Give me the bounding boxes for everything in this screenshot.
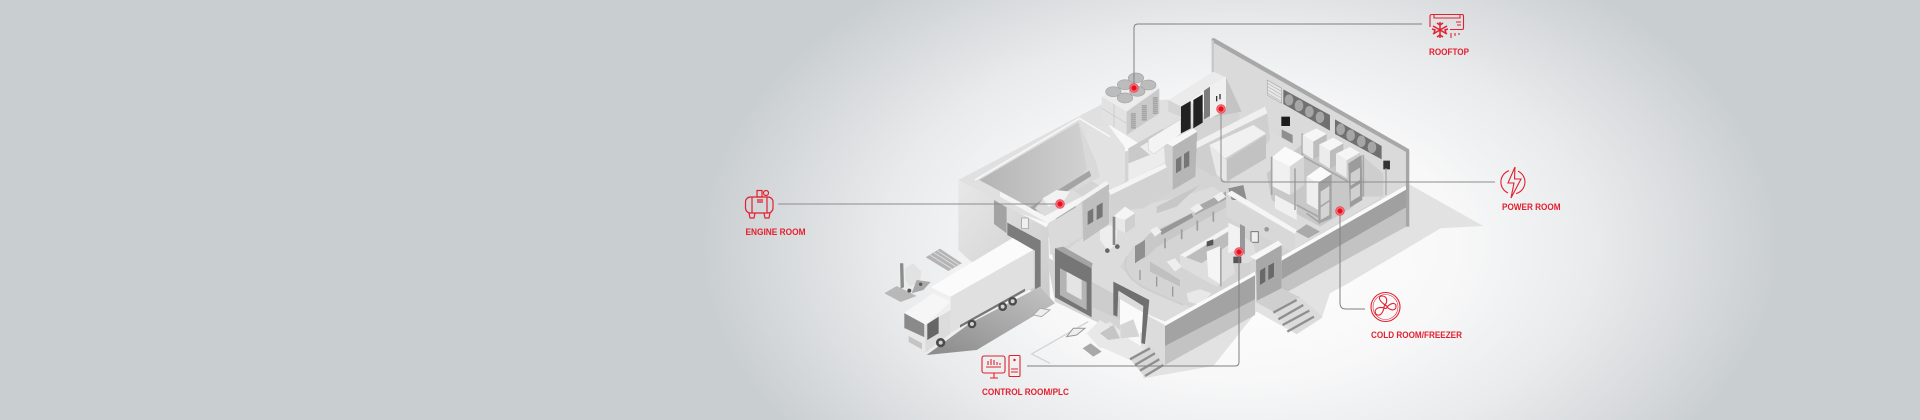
icon: control room bbox=[982, 356, 1020, 378]
cold room floor bbox=[1228, 113, 1383, 248]
wheels bbox=[936, 338, 945, 347]
production partition bbox=[1227, 191, 1297, 253]
icon: engine bbox=[746, 190, 773, 218]
forklift bbox=[884, 263, 931, 302]
marker: power room bbox=[1216, 104, 1226, 114]
loading dock door bbox=[1007, 223, 1041, 289]
cone marker 2 bbox=[1033, 308, 1050, 317]
wall coolers bbox=[1283, 89, 1382, 159]
icon: power bbox=[1501, 167, 1525, 198]
inner low wall bbox=[1108, 163, 1173, 211]
engine room front wall face bbox=[1048, 204, 1082, 255]
opening wall bbox=[1128, 128, 1163, 163]
grille bbox=[905, 328, 924, 353]
ground shadow of building bbox=[1140, 184, 1483, 378]
wall equipment bbox=[1281, 117, 1390, 195]
shelf machine bbox=[1228, 185, 1247, 200]
right wall lower bbox=[1165, 299, 1255, 365]
trailer top bbox=[931, 238, 1033, 297]
white lockers bbox=[1148, 119, 1181, 154]
dock frame 1 bbox=[1055, 247, 1093, 317]
electrical cabinets bbox=[1168, 72, 1226, 133]
marker: control room bbox=[1234, 247, 1244, 257]
marker: rooftop bbox=[1129, 83, 1139, 93]
windscreen bbox=[904, 313, 924, 337]
exterior dock wall bbox=[1092, 282, 1120, 320]
right wall upper bbox=[1165, 275, 1255, 347]
marker: engine room bbox=[1055, 199, 1065, 209]
cold room racks bbox=[1267, 128, 1367, 227]
stairs right bbox=[1255, 288, 1323, 334]
floor plate bbox=[1047, 100, 1408, 325]
stairs left bbox=[1129, 346, 1165, 377]
partition with storage bbox=[1197, 107, 1270, 182]
leader: engine room bbox=[778, 203, 1060, 205]
building interior bbox=[1100, 38, 1409, 305]
cone marker bbox=[1067, 328, 1085, 337]
service opening bbox=[1128, 132, 1165, 182]
rack shadow bbox=[1267, 143, 1367, 227]
leader: rooftop bbox=[1134, 24, 1422, 88]
rear frame bbox=[1348, 155, 1362, 207]
corner shadow on back wall bbox=[1212, 77, 1242, 117]
label: engine room: ENGINE ROOM bbox=[746, 227, 806, 237]
back units bbox=[1303, 128, 1327, 142]
wall corner top bbox=[1145, 313, 1165, 327]
ground shadow under truck bbox=[927, 287, 1055, 355]
wall column bbox=[994, 200, 1007, 233]
platform boxes bbox=[1083, 322, 1123, 357]
icon: fan bbox=[1371, 292, 1400, 322]
cab roof bbox=[904, 293, 951, 325]
door block engine room bbox=[1081, 181, 1109, 242]
small forklift and box bbox=[1100, 207, 1135, 253]
icon: rooftop air conditioner bbox=[1430, 14, 1464, 38]
conveyor line bbox=[1125, 192, 1226, 305]
truck bbox=[904, 238, 1034, 353]
engine room interior bbox=[979, 122, 1090, 217]
left building and engine room bbox=[884, 98, 1207, 363]
engine room rim bbox=[975, 118, 1110, 180]
front frame bbox=[1318, 174, 1332, 224]
dock frame 2 bbox=[1113, 282, 1149, 344]
exterior wall between docks bbox=[1047, 257, 1120, 333]
trailer chassis bbox=[960, 289, 1025, 328]
leader: cold room bbox=[1340, 211, 1365, 309]
main floor bbox=[1047, 100, 1408, 325]
engine pipe bbox=[1030, 171, 1091, 211]
wall louvre bbox=[1267, 80, 1282, 103]
wall sign bbox=[1022, 218, 1028, 229]
right wall top bbox=[1165, 272, 1255, 327]
boxes on platform bbox=[1100, 319, 1139, 340]
trailer side bbox=[951, 250, 1034, 333]
label: cold room: COLD ROOM/FREEZER bbox=[1371, 330, 1463, 340]
control room bbox=[1180, 223, 1257, 287]
engine room front wall top bbox=[1000, 192, 1082, 223]
production floor shadow bbox=[1157, 185, 1200, 213]
cab side bbox=[925, 310, 951, 353]
front units bbox=[1272, 147, 1304, 167]
front walls bbox=[1087, 150, 1409, 377]
parking floor marks bbox=[1032, 322, 1088, 363]
rooftop unit bbox=[1102, 73, 1159, 135]
floor walkway bbox=[1053, 187, 1227, 325]
label: power room: POWER ROOM bbox=[1502, 202, 1560, 212]
floor pallet bbox=[1296, 224, 1320, 238]
floor boxes bbox=[1187, 289, 1212, 305]
roof plane bbox=[958, 98, 1207, 223]
leader: power room bbox=[1221, 109, 1495, 182]
engine machine bbox=[1035, 190, 1082, 224]
back wall bbox=[1212, 39, 1408, 200]
stacked pallet bbox=[926, 249, 962, 271]
exterior left wall bbox=[958, 180, 1050, 300]
engine room side wall bbox=[1073, 122, 1100, 192]
label: control room: CONTROL ROOM/PLC bbox=[982, 387, 1070, 397]
wall face under roof bbox=[1087, 125, 1125, 192]
marker: cold room bbox=[1335, 206, 1345, 216]
platform bbox=[1087, 320, 1147, 360]
rack shadow on back wall bbox=[1353, 157, 1383, 197]
door block bbox=[1165, 128, 1197, 190]
door block right bbox=[1250, 241, 1283, 302]
right corner bbox=[1406, 150, 1409, 227]
label: rooftop: ROOFTOP bbox=[1429, 47, 1469, 57]
front wall end bbox=[1147, 315, 1165, 365]
leader: control room bbox=[1027, 252, 1239, 366]
